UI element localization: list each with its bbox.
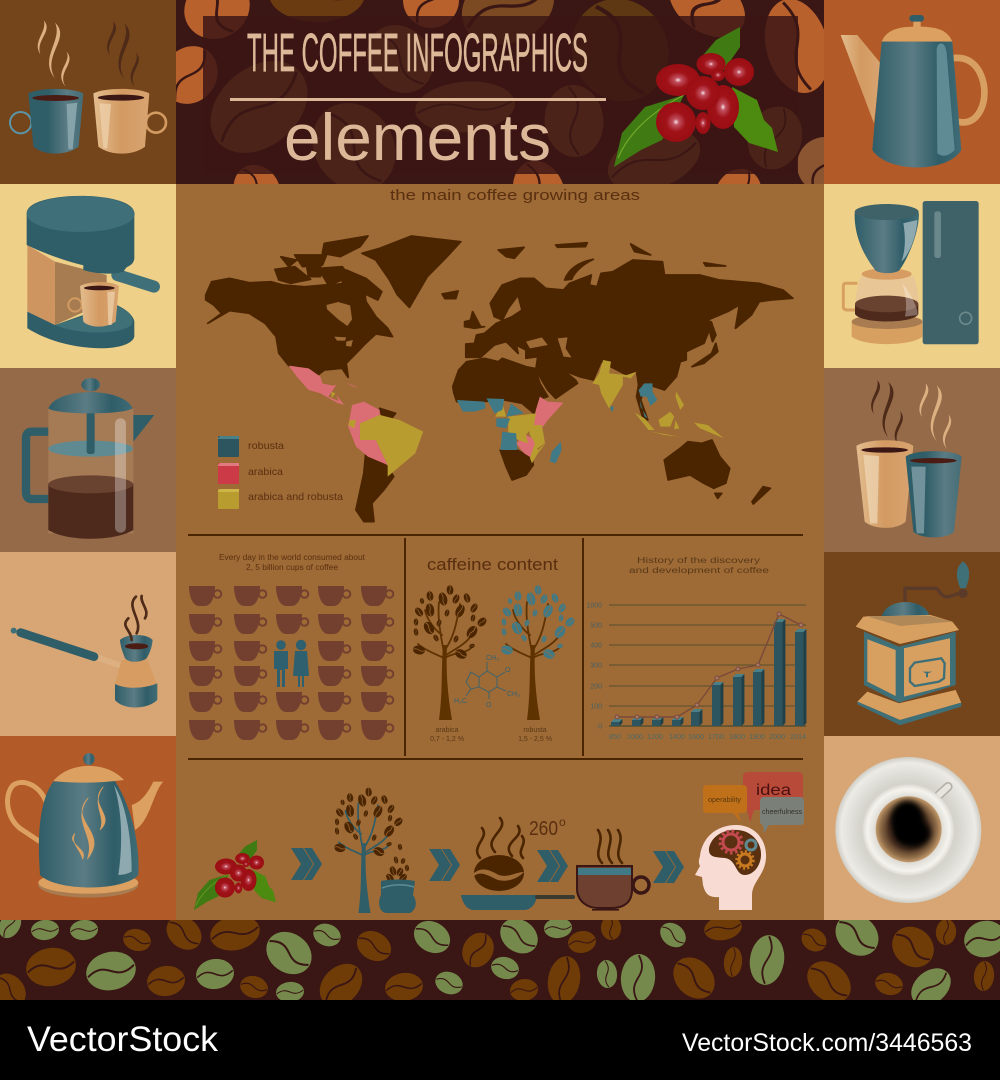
arabica label: arabica	[436, 727, 459, 734]
right column of icon tiles	[824, 0, 1000, 920]
x axis labels: 2014	[790, 732, 806, 741]
bubble: operability: operability	[708, 795, 741, 804]
tile: coffee pot	[824, 0, 1000, 184]
robusta tree	[500, 585, 576, 720]
label: roasting temperature: 260	[529, 818, 558, 840]
x axis labels: 1000	[627, 732, 643, 741]
icon: roasting bean in pan	[461, 818, 575, 910]
y axis labels: 1000	[586, 602, 602, 610]
consumption caption: Every day in the world consumed about	[219, 553, 366, 562]
tile: turkish coffee pot	[0, 552, 176, 736]
caffeine molecule: H₃C	[454, 698, 467, 705]
header banner with coffee beans: THE COFFEE INFOGRAPHICS	[247, 23, 588, 83]
x axis labels: 1400	[669, 732, 685, 741]
x axis labels: 1900	[749, 732, 765, 741]
chart title	[629, 556, 770, 575]
consumption caption: 2, 5 billion cups of coffee	[246, 563, 339, 572]
panel: caffeine content	[412, 555, 576, 743]
header banner with coffee beans	[176, 0, 824, 184]
arrow 4	[653, 851, 684, 883]
legend: arabica: arabica	[248, 466, 283, 478]
header inner panel	[203, 16, 798, 174]
tile: drip coffee maker	[824, 184, 1000, 368]
x axis labels: 2000	[769, 732, 785, 741]
icon: head with gears	[695, 825, 766, 910]
panel: history chart	[586, 556, 806, 741]
y axis labels: 500	[590, 622, 602, 630]
caffeine molecule: CH₃	[507, 691, 520, 698]
left column of icon tiles	[0, 0, 176, 920]
icon: coffee berries with leaves	[614, 27, 778, 167]
robusta label: robusta	[523, 727, 547, 734]
center panel background	[176, 184, 824, 920]
x axis labels: 850	[609, 732, 621, 741]
consumption caption	[219, 553, 366, 572]
tile: espresso machine	[0, 184, 176, 368]
caffeine molecule: O	[486, 702, 492, 709]
x axis labels: 1700	[708, 732, 724, 741]
y axis labels: 300	[590, 662, 602, 670]
tile: two tall cups	[824, 368, 1000, 552]
arrow 1	[291, 848, 322, 880]
watermark left: VectorStock	[27, 1020, 219, 1059]
icon: cup of coffee	[577, 830, 649, 911]
tile: top view cup and saucer	[824, 736, 1000, 920]
trend line	[615, 612, 803, 719]
arabica label: 0,7 - 1,2 %	[430, 736, 464, 743]
map heading: the main coffee growing areas	[390, 187, 640, 204]
icon: man and woman	[274, 640, 309, 687]
label: roasting temperature: o	[559, 815, 566, 829]
arrow 2	[429, 849, 460, 881]
arabica tree	[412, 585, 488, 720]
bars	[611, 619, 806, 726]
caffeine molecule	[454, 655, 520, 709]
title divider	[230, 98, 606, 101]
y axis labels: 200	[590, 684, 602, 690]
caffeine heading: caffeine content	[427, 555, 558, 574]
legend: arabica and robusta: arabica and robusta	[248, 491, 343, 503]
watermark right: VectorStock.com/3446563	[682, 1029, 972, 1057]
y axis labels: 100	[590, 704, 602, 710]
bubble: idea: idea	[756, 782, 791, 799]
y axis labels: 400	[590, 642, 602, 650]
icon: coffee berries small	[194, 840, 276, 910]
panel: daily consumption	[189, 553, 393, 740]
arabica label	[430, 727, 464, 743]
caffeine molecule: CH₃	[486, 655, 499, 662]
icon: tree and coffee bag	[334, 787, 416, 913]
map legend	[218, 436, 343, 509]
x axis labels: 1600	[688, 732, 704, 741]
y axis labels: 0	[598, 724, 602, 730]
tile: french press	[0, 368, 176, 552]
robusta label: 1,5 - 2,5 %	[518, 736, 552, 743]
robusta label	[518, 727, 552, 743]
caffeine molecule: O	[505, 667, 511, 674]
bottom coffee bean strip	[0, 920, 1000, 1000]
subtitle: elements: elements	[284, 100, 551, 174]
x axis labels: 1800	[729, 732, 745, 741]
chart title: and development of coffee	[629, 566, 770, 575]
tile: kettle	[0, 736, 176, 920]
bubble: cheerfulness: cheerfulness	[762, 807, 802, 816]
panel: process flow	[194, 772, 804, 913]
legend: robusta: robusta	[248, 440, 284, 452]
world map: coffee growing areas	[206, 236, 793, 522]
x axis labels: 1200	[647, 732, 663, 741]
speech bubbles	[703, 772, 804, 833]
tile: two mugs	[0, 0, 176, 184]
x axis labels	[609, 732, 806, 741]
cups pictogram grid	[189, 586, 393, 740]
arrow 3	[537, 850, 568, 882]
chart title: History of the discovery	[637, 556, 760, 565]
y axis labels	[586, 602, 602, 730]
tile: coffee grinder	[824, 552, 1000, 736]
